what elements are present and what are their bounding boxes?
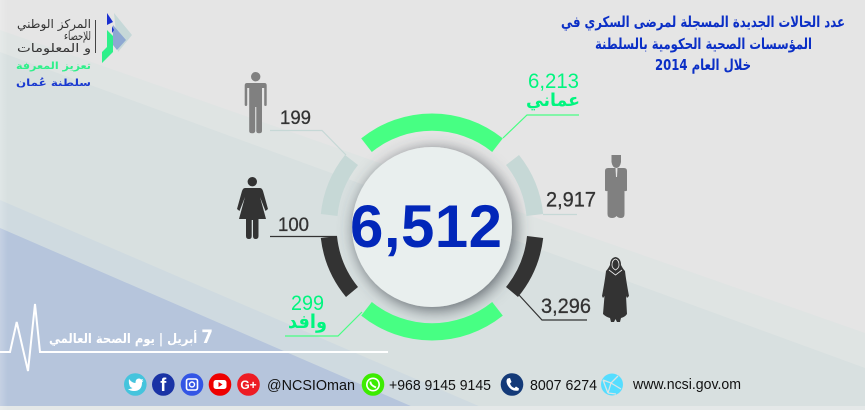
phone number: 8007 6274 <box>530 377 597 394</box>
logo name: للإحصاء <box>64 29 91 43</box>
logo country: سلطنة عُمان <box>16 77 91 89</box>
banner text: 7 أبريل | يوم الصحة العالمي <box>49 326 213 348</box>
total number: 6,512 <box>350 193 502 260</box>
logo slogan: تعزيز المعرفة <box>16 61 91 72</box>
icon: man in dishdasha <box>605 155 627 218</box>
ring arc: female expat <box>321 236 358 297</box>
label: female omani 3,296 <box>519 295 591 320</box>
label: expat 299 <box>285 292 362 336</box>
label: omani 6,213: 6,213 <box>528 70 579 93</box>
label: male expat 199 <box>270 108 346 155</box>
icon: globe <box>601 374 623 396</box>
logo divider <box>95 20 96 53</box>
icon: youtube <box>209 373 231 396</box>
heartbeat line <box>0 304 388 371</box>
icon: woman <box>237 177 268 239</box>
title <box>561 13 845 74</box>
ring arc: omani top <box>361 113 503 152</box>
ring arc: expat bottom <box>361 302 503 341</box>
label: expat 299: 299 <box>291 292 324 315</box>
social handle: @NCSIOman <box>267 377 355 394</box>
label: expat 299: وافد <box>288 311 327 333</box>
ring arc: male expat <box>321 155 358 216</box>
title: خلال العام 2014 <box>655 56 751 74</box>
icon: man <box>245 72 267 133</box>
label: male omani 2,917: 2,917 <box>546 188 596 212</box>
icon: phone <box>501 373 523 396</box>
contact bar <box>124 373 741 396</box>
ring arc: male omani <box>506 155 543 216</box>
whatsapp number: +968 9145 9145 <box>389 377 491 394</box>
icon: google plus: G+ <box>240 378 257 392</box>
center circle <box>350 147 512 307</box>
icon: google plus <box>237 373 260 396</box>
ring arc: female omani <box>506 236 543 297</box>
label: female omani 3,296: 3,296 <box>541 295 591 318</box>
label: omani 6,213 <box>503 70 580 138</box>
label: female expat 100: 100 <box>278 215 309 236</box>
logo mark <box>102 13 132 63</box>
icon: whatsapp <box>362 373 384 396</box>
logo name: و المعلومات <box>17 41 91 56</box>
world health day banner <box>0 304 388 371</box>
label: female expat 100 <box>270 215 337 236</box>
icon: woman in abaya <box>602 257 629 322</box>
website: www.ncsi.gov.om <box>632 377 741 393</box>
label: omani 6,213: عماني <box>526 90 580 111</box>
icon: instagram <box>181 373 203 396</box>
logo name <box>17 17 91 56</box>
icon: twitter <box>124 373 147 396</box>
logo <box>16 13 132 89</box>
icon: facebook: f <box>160 375 167 395</box>
label: male expat 199: 199 <box>280 108 311 129</box>
logo name: المركز الوطني <box>17 17 91 32</box>
icon: facebook <box>152 373 175 396</box>
